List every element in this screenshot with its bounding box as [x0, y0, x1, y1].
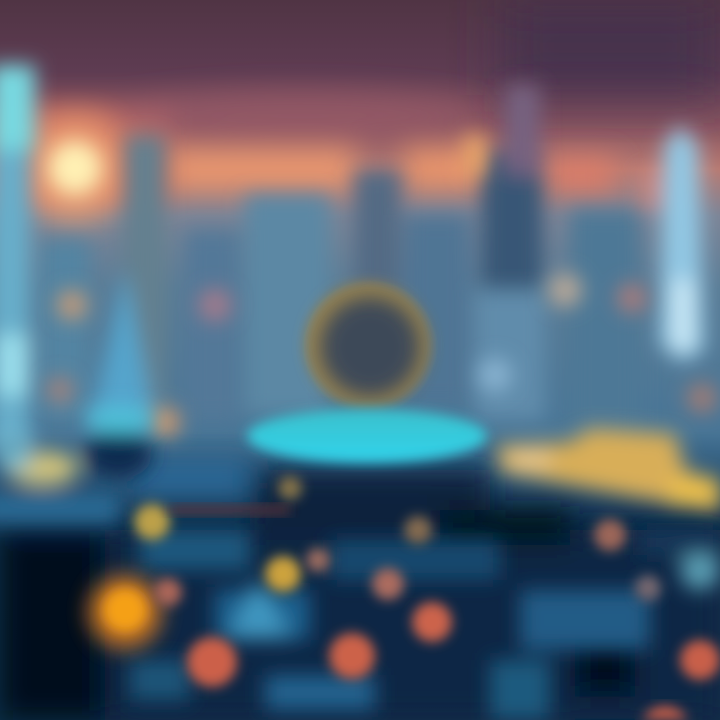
lower city blue blocks [130, 530, 720, 720]
window lights [47, 135, 717, 437]
coin [305, 282, 431, 408]
right sky shade [500, 0, 720, 95]
red streak [170, 506, 290, 514]
sun [20, 115, 130, 225]
orange glowing orbs [87, 476, 720, 720]
dark lower city mass [0, 465, 720, 720]
golden right platform [498, 428, 720, 512]
sunset glow band [0, 90, 615, 200]
right spire [640, 125, 704, 362]
left tower [0, 65, 35, 450]
cyan central platform [247, 409, 487, 463]
left platform [0, 407, 154, 524]
skyline buildings [40, 85, 640, 430]
